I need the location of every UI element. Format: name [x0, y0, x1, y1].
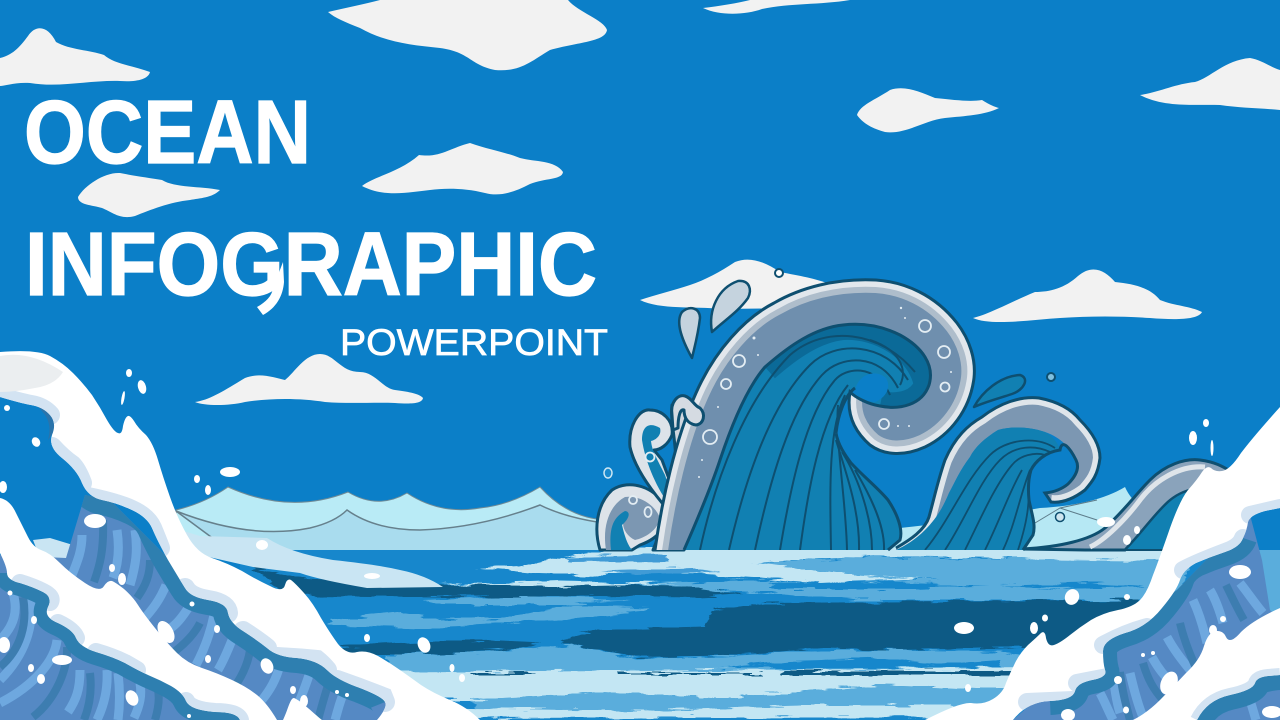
- mid blue upper band: [640, 557, 1190, 600]
- bubble on cloud: [775, 269, 783, 277]
- droplet blue: [974, 375, 1025, 407]
- main wave dark inner band: [765, 325, 929, 407]
- cloud: top right: [1140, 58, 1280, 110]
- bubble right: [1047, 373, 1055, 381]
- curl low blue centre: [610, 511, 632, 550]
- bubble right hills: [1056, 512, 1064, 522]
- sea streaks: [250, 548, 1190, 718]
- front foam rim shading: [20, 583, 240, 720]
- cartoon wave: left small curls: [597, 405, 700, 550]
- cloud: under title: [78, 173, 220, 217]
- subheading: POWERPOINT: POWERPOINT: [340, 322, 608, 363]
- droplet right: [711, 281, 750, 332]
- cloud: top sliver: [703, 0, 850, 14]
- thin light line: [440, 581, 680, 586]
- foam wave: right body: [1013, 515, 1280, 720]
- second wave rim: [896, 398, 1100, 548]
- sea base: [240, 550, 1280, 720]
- white foam right front: [1133, 608, 1280, 720]
- droplet left: [679, 308, 700, 358]
- blue streak: [720, 658, 1000, 668]
- wave stem: [653, 405, 700, 550]
- foam rim shading: [0, 397, 385, 702]
- cloud: top left: [0, 28, 150, 86]
- foam wave: left back crest: [0, 351, 480, 720]
- lighter streak over the sea left: [423, 596, 632, 605]
- thin lines right: [1035, 500, 1097, 523]
- light band: [380, 668, 1040, 700]
- third wave rim: [1090, 467, 1205, 547]
- curl low grey inner: [605, 497, 660, 550]
- body fill: [0, 495, 400, 720]
- main wave blue body: [684, 324, 930, 550]
- front hills band left: [176, 505, 620, 551]
- small dark band: [340, 640, 543, 655]
- main wave bubbles: [629, 320, 950, 517]
- foam wave: right crests: [925, 407, 1280, 720]
- cartoon wave: main large wave: [629, 280, 974, 550]
- clouds: [0, 0, 1280, 405]
- large dark band: [559, 600, 1140, 657]
- mid band left: [330, 605, 650, 628]
- cartoon wave: second wave: [896, 398, 1100, 550]
- bubble lower left: [604, 468, 612, 478]
- cartoon wave: third wave: [1023, 460, 1232, 550]
- foam wave: left blue body: [0, 483, 400, 720]
- mid band lower: [385, 645, 1060, 676]
- second wave blue body: [896, 428, 1060, 550]
- white foam back: [0, 351, 480, 720]
- third wave crest: [1023, 460, 1232, 550]
- light band bottom: [440, 705, 1010, 718]
- cloud: lower left: [195, 354, 423, 405]
- main wave crest: [655, 280, 974, 550]
- mid band bottom: [470, 685, 1040, 712]
- curl tall blue inner: [642, 425, 672, 503]
- cloud: right: [973, 269, 1202, 322]
- heading: INFOGRAPHIC: INFOGRAPHIC: [25, 215, 597, 315]
- second wave crest: [896, 398, 1100, 550]
- second wave outline: [896, 398, 1100, 550]
- heading swash on letter G: [257, 262, 284, 315]
- right foam rim shading: [1027, 508, 1280, 702]
- main wave pale rim: [655, 280, 974, 550]
- main wave curl lines: [700, 336, 915, 550]
- curl: tall: [630, 410, 675, 510]
- right sea patch: [1240, 550, 1280, 620]
- cloud: top centre: [328, 0, 607, 70]
- heading: OCEAN: OCEAN: [24, 83, 311, 183]
- curl: low left: [597, 485, 667, 550]
- small foam spike bottom: [283, 698, 322, 720]
- light upper surface: [475, 548, 1190, 583]
- far hills right: [880, 487, 1170, 550]
- far hills left: [176, 487, 610, 550]
- right stripes: [1050, 538, 1280, 720]
- main wave eye: [855, 373, 888, 402]
- third wave blue body: [1125, 490, 1195, 550]
- right body fill: [1013, 515, 1280, 720]
- cloud: middle: [362, 143, 563, 194]
- dark streak: [250, 566, 745, 597]
- right front rim shading: [1197, 675, 1280, 720]
- title: [24, 83, 608, 363]
- white foam right back: [925, 407, 1280, 720]
- cartoon wave: small droplets: [604, 269, 1055, 478]
- second wave lines: [925, 441, 1055, 550]
- spray droplets: [0, 369, 1280, 720]
- foam grey curl top: [0, 355, 63, 392]
- blue holes in light surface: [565, 555, 720, 574]
- main wave hook: [672, 396, 703, 430]
- white foam front: [0, 498, 277, 720]
- blue streaks in mid band: [766, 582, 1150, 589]
- cloud: centre: [857, 88, 999, 132]
- main wave tiny dots: [698, 307, 952, 478]
- stripes: [0, 483, 385, 720]
- main wave outline: [655, 280, 974, 550]
- foam wave: left lip shadow: [35, 404, 57, 440]
- foam wave: left front crest: [0, 498, 322, 720]
- sea: [240, 548, 1280, 720]
- thin dark lines: [470, 671, 1012, 675]
- cloud: behind big wave: [640, 260, 832, 309]
- light foam trail left: [33, 530, 443, 588]
- distant light waves: [176, 487, 1170, 551]
